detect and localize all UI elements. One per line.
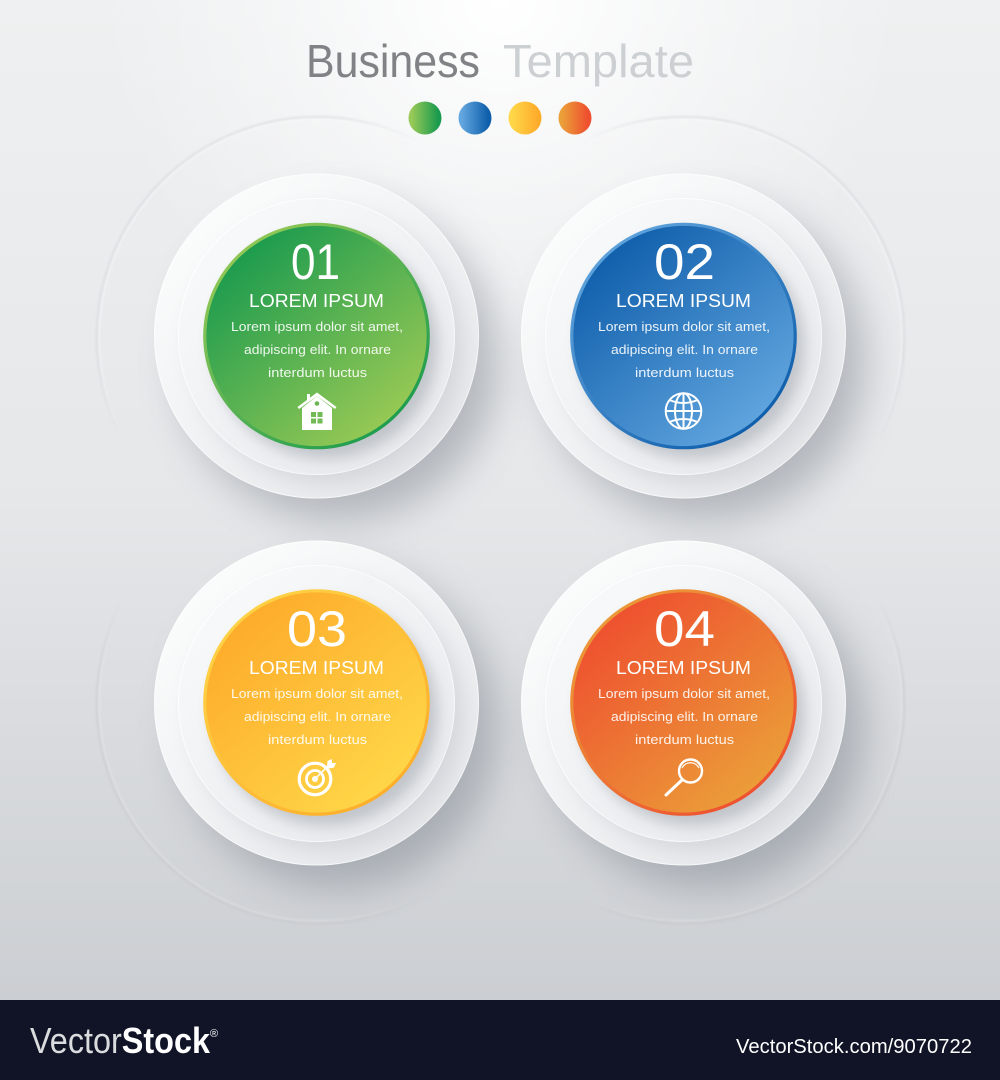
- icon: house: [298, 392, 336, 430]
- large faint background circles: [96, 116, 904, 734]
- panel: 02 blue: [522, 174, 865, 520]
- logo: VectorStock: [30, 1020, 211, 1061]
- body text: adipiscing elit. In ornare: [244, 709, 391, 724]
- panel: 04 orange: [522, 541, 865, 887]
- footer bar: [0, 1000, 1000, 1080]
- body text: Lorem ipsum dolor sit amet,: [231, 319, 403, 334]
- body text: adipiscing elit. In ornare: [244, 342, 391, 357]
- body text: [598, 686, 770, 747]
- icon: target: [299, 759, 336, 795]
- heading: LOREM IPSUM: [249, 658, 384, 678]
- heading: LOREM IPSUM: [616, 658, 751, 678]
- legend dots: [408, 102, 592, 134]
- body text: interdum luctus: [268, 732, 368, 747]
- body text: interdum luctus: [635, 365, 735, 380]
- body text: [231, 319, 403, 380]
- title: Template: [503, 35, 694, 87]
- number 02: 02: [654, 234, 715, 290]
- body text: Lorem ipsum dolor sit amet,: [598, 686, 770, 701]
- number 01: 01: [291, 234, 340, 290]
- panel: 03 yellow: [154, 541, 498, 887]
- number 04: 04: [654, 601, 715, 657]
- heading: LOREM IPSUM: [249, 291, 384, 311]
- body text: Lorem ipsum dolor sit amet,: [231, 686, 403, 701]
- body text: adipiscing elit. In ornare: [611, 342, 758, 357]
- heading: LOREM IPSUM: [616, 291, 751, 311]
- number 03: 03: [287, 601, 347, 657]
- body text: Lorem ipsum dolor sit amet,: [598, 319, 770, 334]
- body text: adipiscing elit. In ornare: [611, 709, 758, 724]
- image id: VectorStock.com/9070722: [736, 1036, 972, 1058]
- icon: magnifying glass: [666, 760, 702, 795]
- body text: [598, 319, 770, 380]
- body text: interdum luctus: [635, 732, 735, 747]
- title: Business: [306, 35, 480, 87]
- logo: ®: [210, 1028, 218, 1040]
- body text: [231, 686, 403, 747]
- body text: interdum luctus: [268, 365, 368, 380]
- panel: 01 green: [154, 174, 498, 520]
- title: [306, 35, 694, 87]
- icon: globe: [666, 393, 702, 429]
